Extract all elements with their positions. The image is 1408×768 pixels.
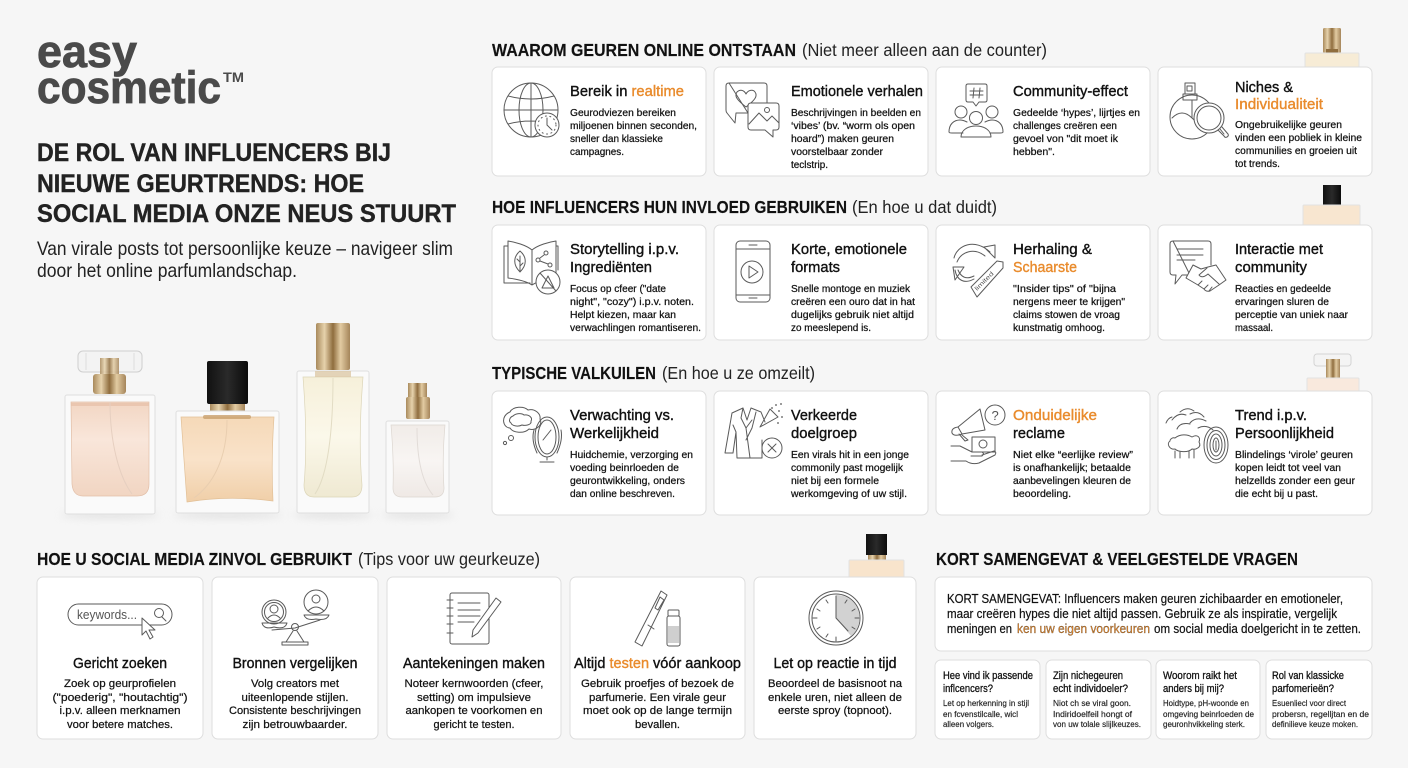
body: kopen leidt tot veel van	[1235, 462, 1341, 474]
tip card: bronnen vergelijken	[212, 577, 378, 739]
faq card: nichegeuren: echt individoeler?	[1053, 683, 1128, 695]
title: Gericht zoeken	[73, 655, 167, 672]
faq card: nichegeuren: Niot ch se viral goon.	[1053, 698, 1131, 708]
faq card: nichegeuren: Zijn nichegeuren	[1053, 670, 1123, 682]
icon: balance with profiles	[262, 590, 329, 645]
card: community-effect	[936, 67, 1150, 176]
body	[1235, 283, 1348, 334]
title: Verwachting vs.	[570, 407, 674, 424]
body	[768, 678, 903, 717]
tip card: altijd testen	[570, 577, 745, 739]
title: Ingrediënten	[570, 259, 652, 276]
title: Altijd testen vóór aankoop	[574, 655, 741, 672]
body: kunstmatig omhoog.	[1013, 322, 1105, 334]
title: reclame	[1013, 425, 1065, 442]
heading: hoe influencers hun invloed gebruiken: HOE INFLUENCERS HUN INVLOED GEBRUIKEN	[492, 197, 847, 217]
body: campagnes.	[570, 146, 624, 158]
body: tot trends.	[1235, 158, 1280, 170]
title: Onduidelijke	[1013, 407, 1097, 424]
icon: search bar with cursor: keywords...	[77, 607, 137, 622]
body: is onafhankelijk; betaalde	[1013, 462, 1131, 474]
body: die echt bij u past.	[1235, 488, 1318, 500]
body	[581, 678, 734, 731]
icon: chat with heart and image	[726, 83, 779, 137]
title: Korte, emotionele	[791, 241, 907, 258]
heading: waarom geuren online ontstaan: WAAROM GEUREN ONLINE ONTSTAAN	[492, 40, 796, 60]
tip card: aantekeningen maken	[387, 577, 561, 739]
body: Reacties en gedeelde	[1235, 283, 1331, 295]
body: dan online beschreven.	[570, 488, 675, 500]
body	[1235, 119, 1362, 170]
faq card: klassieke parfumerieen: parfomerieën?	[1272, 683, 1334, 695]
body: Snelle montoge en muziek	[791, 283, 911, 295]
body: night", "cozy") i.p.v. noten.	[570, 296, 694, 308]
body: Focus op cfeer ("date	[570, 283, 666, 295]
title: Niches &	[1235, 79, 1293, 96]
icon: phone with play button	[736, 241, 770, 302]
body: Huidchemie, verzorging en	[570, 449, 693, 461]
title: Emotionele verhalen	[791, 83, 923, 100]
decorative bottle behind row 2	[1303, 185, 1360, 227]
body: bevallen.	[635, 719, 680, 731]
decorative bottle behind row 1	[1305, 28, 1359, 69]
body: communilies en groeien uit	[1235, 145, 1357, 157]
card: niches en individualiteit	[1158, 67, 1372, 176]
body: helzellds zonder een geur	[1235, 475, 1355, 487]
body: Helpt kiezen, maar kan	[570, 309, 676, 321]
bottle: pink with clear cap	[65, 351, 155, 514]
body: uiteenlopende stijlen.	[242, 692, 348, 704]
title: Bereik in realtime	[570, 83, 684, 100]
body: parfumerie. Een virale geur	[589, 692, 726, 704]
faq card: nichegeuren	[1046, 660, 1151, 739]
body: "Insider tips" of "bijna	[1013, 283, 1116, 295]
icon: blazer, party popper and cross	[725, 403, 783, 458]
heading: waarom geuren online ontstaan: (Niet meer alleen aan de counter)	[802, 40, 1047, 60]
body: commonily past mogelijk	[791, 462, 904, 474]
body	[1235, 449, 1355, 500]
body: hebben".	[1013, 146, 1055, 158]
faq card: waarom anders: anders bij mij?	[1163, 683, 1224, 695]
card: trend i.p.v. persoonlijkheid	[1158, 391, 1372, 515]
body	[570, 107, 697, 158]
main title: SOCIAL MEDIA ONZE NEUS STUURT	[37, 200, 456, 228]
body: creëren een ouro dat in hat	[791, 296, 915, 308]
heading: hoe u social media zinvol gebruikt	[37, 549, 540, 569]
icon: repeat arrows and tag: limited	[974, 271, 995, 292]
faq card: nichegeuren: Indiridoelfeil hongt of	[1053, 709, 1133, 719]
body: massaal.	[1235, 322, 1273, 334]
card: verwachting vs werkelijkheid	[492, 391, 706, 515]
logo	[37, 26, 244, 113]
heading: waarom geuren online ontstaan	[492, 40, 1047, 60]
title: Persoonlijkheid	[1235, 425, 1334, 442]
faq card: waarom anders: omgeving beinrloeden de	[1163, 709, 1254, 719]
summary panel: maar creëren hypes die niet altijd passen. Gebruik ze als inspiratie, vergelijk	[947, 606, 1338, 621]
tip card: let op reactie in tijd	[754, 577, 916, 739]
icon: open book	[504, 241, 560, 294]
heading: hoe influencers hun invloed gebruiken: (En hoe u dat duidt)	[852, 197, 997, 217]
body: verwachlingen romantiseren.	[570, 322, 701, 334]
body: hoard”) maken geuren	[791, 133, 894, 145]
faq card: klassieke parfumerieen	[1266, 660, 1372, 739]
title	[791, 407, 857, 442]
subtitle: Van virale posts tot persoonlijke keuze – navigeer slim	[37, 238, 453, 260]
body: dugelijks gebruik niet altijd	[791, 309, 914, 321]
title: Individualiteit	[1235, 96, 1324, 113]
main title	[37, 139, 456, 228]
title: formats	[791, 259, 840, 276]
faq card: waarom anders	[1156, 660, 1260, 739]
body: Noteer kernwoorden (cfeer,	[404, 678, 544, 690]
icon: thought cloud and mirror	[503, 407, 562, 462]
body	[1013, 283, 1125, 334]
title	[1013, 241, 1092, 276]
body	[790, 449, 909, 500]
body	[570, 449, 693, 500]
decorative bottle behind tips row	[849, 534, 904, 579]
body	[52, 678, 188, 731]
body: Gebruik proefjes of bezoek de	[581, 678, 734, 690]
card: herhaling en schaarste	[936, 225, 1150, 340]
body: Beschrijvingen in beelden en	[791, 107, 921, 119]
body: teclstrip.	[791, 159, 828, 171]
card: verkeerde doelgroep	[714, 391, 928, 515]
body: zijn betrouwbaarder.	[242, 719, 348, 731]
body: claims stowen de vroag	[1013, 309, 1120, 321]
body: aanbevelingen kleuren de	[1013, 475, 1131, 487]
logo: TM	[223, 69, 244, 85]
title	[570, 241, 679, 276]
body: eerste sproy (topnoot).	[778, 705, 892, 717]
body: Niet elke “eerlijke review”	[1013, 449, 1134, 461]
title: community	[1235, 259, 1307, 276]
icon: sheep and fingerprint	[1166, 409, 1228, 463]
faq card: waarom anders: Hoidtype, pH-woonde en	[1163, 698, 1249, 708]
body: Een virals hit in een jonge	[791, 449, 909, 461]
body	[1013, 107, 1140, 158]
body: moet ook op de lange termijn	[583, 705, 732, 717]
faq card: passende influencers: alleen volgers.	[943, 719, 994, 729]
icon: megaphone, question and money	[951, 405, 1005, 464]
body: ("poederig", "houtachtig")	[52, 692, 188, 704]
faq card: passende influencers: en fcvenstilcalle, wicl	[943, 709, 1018, 719]
heading: typische valkuilen: TYPISCHE VALKUILEN	[492, 363, 656, 383]
faq card: passende influencers: Hee vind ik passende	[943, 670, 1033, 682]
logo: easy	[37, 26, 137, 77]
title: Schaarste	[1013, 259, 1077, 276]
heading: hoe u social media zinvol gebruikt: (Tips voor uw geurkeuze)	[358, 549, 540, 569]
body: Gedeelde ‘hypes’, lijrtjes en	[1013, 107, 1140, 119]
body: sneller dan klassieke	[570, 133, 663, 145]
title: Let op reactie in tijd	[774, 655, 896, 672]
body: Zoek op geurprofielen	[64, 678, 176, 690]
body: setting) om impulsieve	[417, 692, 531, 704]
body: zo meeslepend is.	[791, 322, 871, 334]
body	[570, 283, 701, 334]
heading: kort samengevat en veelgestelde vragen: KORT SAMENGEVAT & VEELGESTELDE VRAGEN	[936, 549, 1298, 569]
card: bereik in realtime	[492, 67, 706, 176]
body: challenges creëren een	[1013, 120, 1117, 132]
body: werkomgeving of uw stijl.	[790, 488, 907, 500]
title: Storytelling i.p.v.	[570, 241, 679, 258]
card: emotionele verhalen	[714, 67, 928, 176]
decorative bottle behind row 3	[1307, 354, 1359, 393]
icon: search bar with cursor	[68, 604, 172, 639]
body: niet bij een formele	[791, 475, 879, 487]
title	[1013, 407, 1097, 442]
icon: chat and handshake	[1170, 241, 1226, 291]
summary panel: meningen en	[947, 621, 1012, 636]
body: Ongebruikelijke geuren	[1235, 119, 1342, 131]
body: enkele uren, niet alleen de	[768, 692, 902, 704]
subtitle: door het online parfumlandschap.	[37, 260, 297, 282]
title	[1235, 241, 1324, 276]
main title: DE ROL VAN INFLUENCERS BIJ	[37, 139, 391, 167]
perfume bottles group	[60, 323, 454, 518]
body: gevoel von "dit moet ik	[1013, 133, 1119, 145]
faq card: waarom anders: Woorom raikt het	[1163, 670, 1237, 682]
faq card: passende influencers	[935, 660, 1040, 739]
bottle: small clear with pump	[386, 383, 449, 513]
title	[570, 407, 674, 442]
heading: typische valkuilen: (En hoe u ze omzeilt)	[662, 363, 815, 383]
title: Werkelijkheid	[570, 425, 659, 442]
faq card: waarom anders: geuronhvikkeling sterk.	[1163, 719, 1245, 729]
body: aankopen te voorkomen en	[406, 705, 542, 717]
title: Herhaling &	[1013, 241, 1092, 258]
body: voorstelbaar zonder	[791, 146, 883, 158]
title	[791, 241, 907, 276]
faq card: klassieke parfumerieen: Esuenliecl voor direct	[1272, 698, 1347, 708]
faq card: nichegeuren: von uw tolale slijlkeuzes.	[1053, 719, 1141, 729]
body: gericht te testen.	[434, 719, 514, 731]
body: Consistente beschrijvingen	[229, 705, 361, 717]
body	[1013, 449, 1134, 500]
title: Bronnen vergelijken	[232, 655, 358, 672]
body: Volg creators met	[251, 678, 340, 690]
icon: megaphone, question and money: ?	[992, 408, 999, 423]
logo: cosmetic	[37, 62, 221, 113]
card: storytelling	[492, 225, 706, 340]
body: nergens meer te krijgen"	[1013, 296, 1125, 308]
icon: notebook and pen	[447, 593, 501, 644]
icon: repeat arrows and tag	[953, 244, 1003, 297]
bottle: peach with black cap	[176, 361, 279, 513]
tip card: gericht zoeken	[37, 577, 203, 739]
body: Blindelings ‘virole’ geuren	[1235, 449, 1353, 461]
card: korte emotionele formats	[714, 225, 928, 340]
body: Beoordeel de basisnoot na	[768, 678, 903, 690]
icon: perfume with magnifier	[1170, 83, 1228, 139]
faq card: passende influencers: Let op herkenning in stijl	[943, 698, 1029, 708]
body: vinden een pobliek in kleine	[1235, 132, 1362, 144]
faq card: klassieke parfumerieen: probersn, regelljtan en de	[1272, 709, 1369, 719]
icon: clock with shaded sector	[809, 591, 863, 645]
body: voeding beinrloeden de	[570, 462, 679, 474]
title: Community-effect	[1013, 83, 1129, 100]
title: Trend i.p.v.	[1235, 407, 1307, 424]
faq card: klassieke parfumerieen: Rol van klassicke	[1272, 670, 1344, 682]
body: i.p.v. alleen merknamen	[60, 705, 180, 717]
main title: NIEUWE GEURTRENDS: HOE	[37, 170, 364, 198]
summary panel	[935, 577, 1372, 651]
title: Verkeerde	[791, 407, 857, 424]
faq card: klassieke parfumerieen: definilieve keuze moken.	[1272, 719, 1358, 729]
subtitle	[37, 238, 453, 282]
title: Aantekeningen maken	[403, 655, 545, 672]
body	[791, 283, 915, 334]
body	[791, 107, 921, 171]
body: beoordeling.	[1013, 488, 1071, 500]
bottle: tall cream with gold cap	[297, 323, 369, 513]
body: miljoenen binnen seconden,	[570, 120, 697, 132]
body: ervaringen sluren de	[1235, 296, 1329, 308]
summary panel: KORT SAMENGEVAT: Influencers maken geuren zichibaarder en emotioneler,	[947, 591, 1343, 606]
icon: test strip and vial	[635, 591, 680, 646]
icon: community with hashtag	[949, 84, 1003, 137]
summary panel: ken uw eigen voorkeuren	[1017, 621, 1150, 636]
heading: typische valkuilen	[492, 363, 815, 383]
heading: hoe u social media zinvol gebruikt: HOE U SOCIAL MEDIA ZINVOL GEBRUIKT	[37, 549, 352, 569]
card: onduidelijke reclame	[936, 391, 1150, 515]
title: Interactie met	[1235, 241, 1324, 258]
body	[229, 678, 361, 731]
faq card: passende influencers: inflcencers?	[943, 683, 993, 695]
body: perceptie van uniek naar	[1235, 309, 1348, 321]
title	[1235, 79, 1324, 113]
body: Geurodviezen bereiken	[570, 107, 676, 119]
icon: globe with clock	[504, 83, 559, 137]
body: ‘vibes’ (bv. “worm ols open	[791, 120, 915, 132]
summary panel: om social media doelgericht in te zetten.	[1154, 621, 1361, 636]
title: doelgroep	[791, 425, 857, 442]
body: geurontwikkeling, onders	[570, 475, 685, 487]
body	[404, 678, 544, 731]
card: interactie met community	[1158, 225, 1372, 340]
body: voor betere matches.	[67, 719, 173, 731]
title	[1235, 407, 1334, 442]
